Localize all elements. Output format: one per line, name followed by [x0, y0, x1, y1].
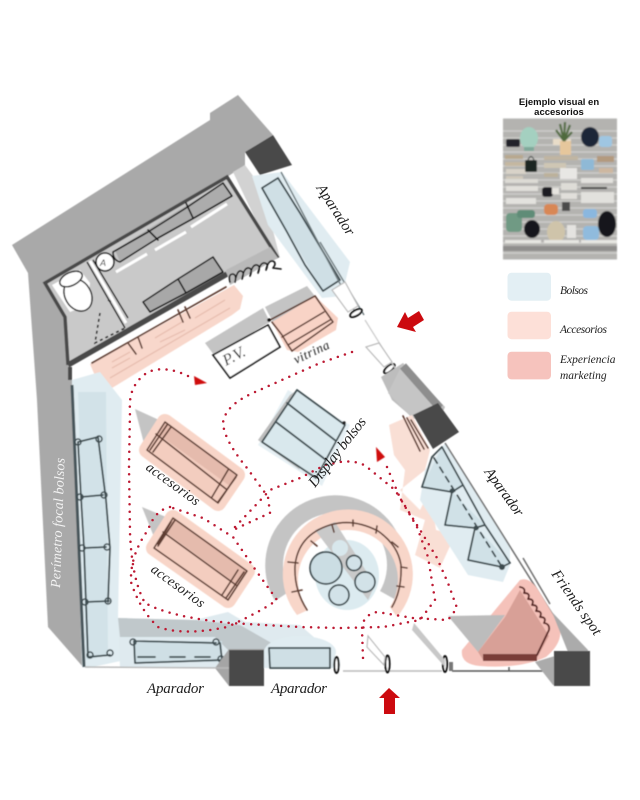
- legend: [508, 273, 616, 382]
- right outer wall line: [445, 443, 575, 650]
- bottom window display left: [130, 639, 224, 663]
- bottom grey and blue band: [118, 612, 340, 668]
- service door: [87, 260, 128, 343]
- display bolsos label: Display bolsos: [305, 414, 370, 491]
- display bolsos table: [258, 390, 350, 486]
- accessory wall zone: [90, 285, 243, 388]
- center blue zone: [315, 522, 379, 610]
- vitrina: [265, 286, 338, 352]
- bottom wall column: [215, 649, 264, 686]
- photo caption: accesorios: [534, 107, 584, 118]
- aparador label bottom right: Aparador: [270, 681, 327, 697]
- water heater circle: A: [99, 258, 106, 268]
- red arrow small left: [194, 376, 207, 385]
- aparador label top: Aparador: [312, 181, 358, 239]
- friends spot label: Friends spot: [547, 566, 605, 639]
- spiral curtain: [226, 247, 281, 285]
- legend label accesorios: Accesorios: [559, 324, 608, 336]
- example photo of accessories wall: [503, 118, 617, 260]
- toilet: [52, 268, 98, 316]
- water heater circle: [96, 253, 114, 271]
- legend swatch bolsos: [508, 273, 551, 301]
- service room floor: [45, 177, 278, 365]
- accessories table two: [142, 507, 247, 600]
- left perimeter blue zone: [72, 372, 125, 668]
- right window display: [420, 443, 510, 582]
- legend label bolsos: Bolsos: [560, 285, 589, 297]
- bottom right column: [535, 612, 590, 686]
- dark corner column top: [245, 135, 292, 175]
- grey strip by service room: [233, 165, 280, 258]
- front wall line: [85, 667, 555, 671]
- top bags and plant: [506, 122, 612, 155]
- second row products: [505, 155, 614, 180]
- top storage shelves: [113, 183, 232, 272]
- legend label marketing: marketing: [560, 370, 607, 382]
- aparador label right: Aparador: [480, 464, 527, 520]
- vitrina label: vitrina: [291, 337, 332, 367]
- lower storage shelves: [143, 257, 223, 312]
- bottom row bags: [506, 209, 616, 243]
- red arrow small right: [376, 447, 385, 462]
- side entrance door: [332, 282, 396, 375]
- friends spot zone: [448, 579, 560, 667]
- perimeter hand-drawn shelves: [72, 385, 113, 667]
- circular display grey shadow: [265, 495, 405, 601]
- entrance door leaves bottom: [367, 623, 445, 667]
- perimeter label: Perímetro focal bolsos: [49, 457, 69, 589]
- legend swatch experiencia: [508, 352, 551, 379]
- circular display peach zone: [283, 509, 413, 617]
- bottom window display right: [264, 636, 336, 669]
- customer path dotted loops: [129, 352, 457, 658]
- display ledges: [503, 240, 617, 251]
- round display tables: [310, 552, 375, 605]
- right corner accessories zone: [389, 415, 455, 568]
- accessories table one: [135, 409, 237, 503]
- floor plan: [12, 95, 590, 686]
- top right window display: [252, 172, 364, 315]
- aparador label bottom left: Aparador: [146, 681, 204, 697]
- legend swatch accesorios: [508, 312, 551, 339]
- P.V. counter: P.V.: [219, 343, 249, 370]
- side entrance red arrow: [397, 311, 424, 332]
- P.V. counter: [205, 308, 280, 378]
- service room walls: [45, 177, 278, 380]
- curved shelf arc: [288, 520, 407, 610]
- entrance door markers bottom: [334, 656, 453, 673]
- bottom entrance red arrow: [379, 688, 400, 714]
- middle row products: [505, 178, 614, 215]
- right wall column: [381, 363, 459, 449]
- exterior walls: [12, 95, 273, 667]
- photo caption: Ejemplo visual en: [519, 97, 599, 108]
- accesorios label two: accesorios: [148, 562, 208, 612]
- slat wall lines: [503, 131, 617, 253]
- accesorios label one: accesorios: [143, 460, 203, 510]
- legend label experiencia: Experiencia: [559, 354, 616, 366]
